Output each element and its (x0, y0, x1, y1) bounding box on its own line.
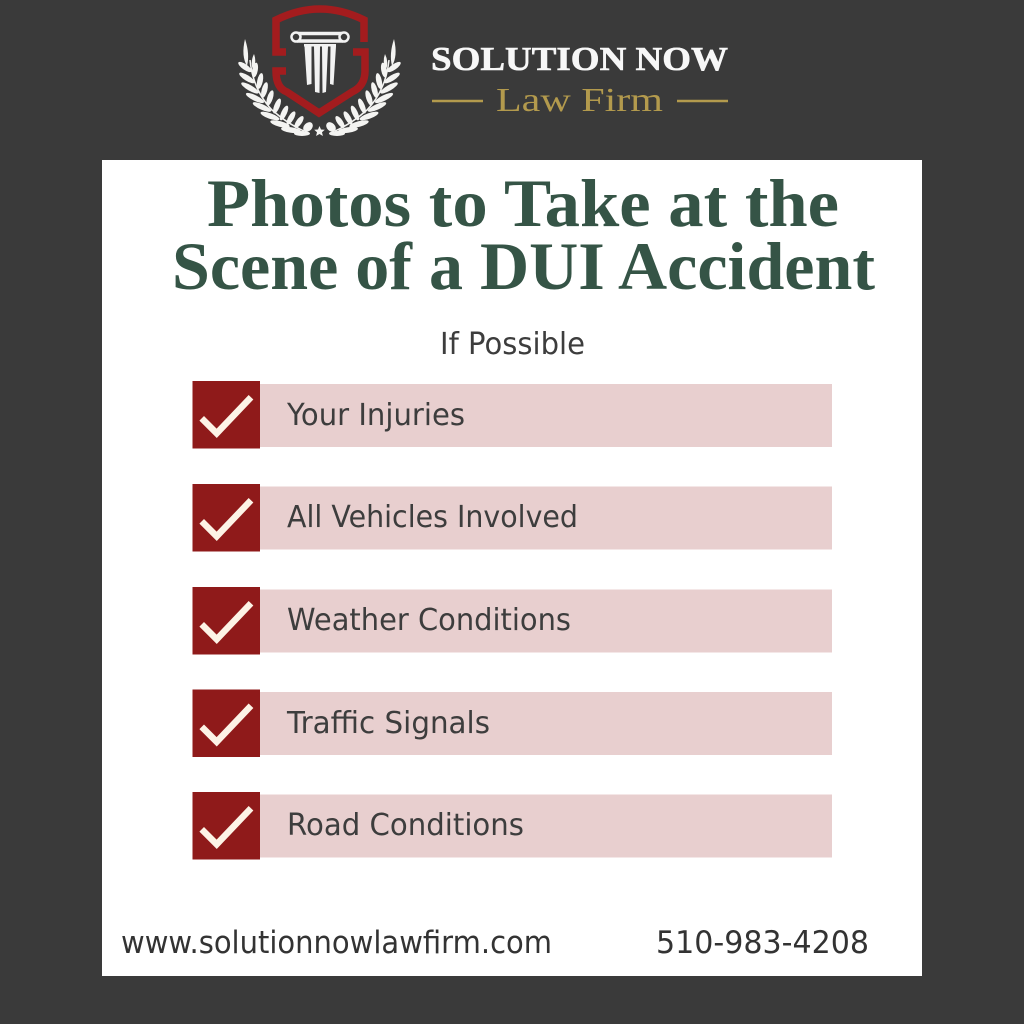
icon: left laurel (237, 39, 315, 136)
logo: Solution Now Law Firm (237, 9, 728, 136)
panel: white content card (102, 160, 922, 976)
footer: phone number: 510-983-4208 (656, 925, 869, 961)
title: Scene of a DUI Accident (172, 228, 875, 304)
checklist item: Road Conditions (192, 792, 832, 860)
footer: website: www.solutionnowlawfirm.com (121, 925, 552, 961)
checklist item: Your Injuries: Your Injuries (286, 398, 465, 433)
checklist item: Weather Conditions: Weather Conditions (287, 603, 571, 638)
checklist item: All Vehicles Involved: All Vehicles Involved (287, 500, 578, 535)
checklist item: Traffic Signals (192, 690, 832, 757)
checklist item: Road Conditions: Road Conditions (287, 808, 524, 843)
icon: right laurel (324, 39, 402, 136)
logo wordmark: Solution Now: SOLUTION NOW (431, 41, 728, 78)
icon: star (314, 126, 325, 136)
title (172, 165, 875, 304)
icon: pillar (292, 32, 348, 93)
icon: shield outline (276, 9, 365, 113)
checklist item: All Vehicles Involved (192, 484, 832, 552)
checklist item: Traffic Signals: Traffic Signals (286, 706, 490, 741)
checklist item: Weather Conditions (192, 587, 832, 654)
subtitle: If Possible (440, 327, 585, 362)
checklist item: Your Injuries (192, 381, 832, 448)
logo wordmark: Law Firm: Law Firm (496, 82, 663, 119)
title: Photos to Take at the (207, 165, 839, 241)
